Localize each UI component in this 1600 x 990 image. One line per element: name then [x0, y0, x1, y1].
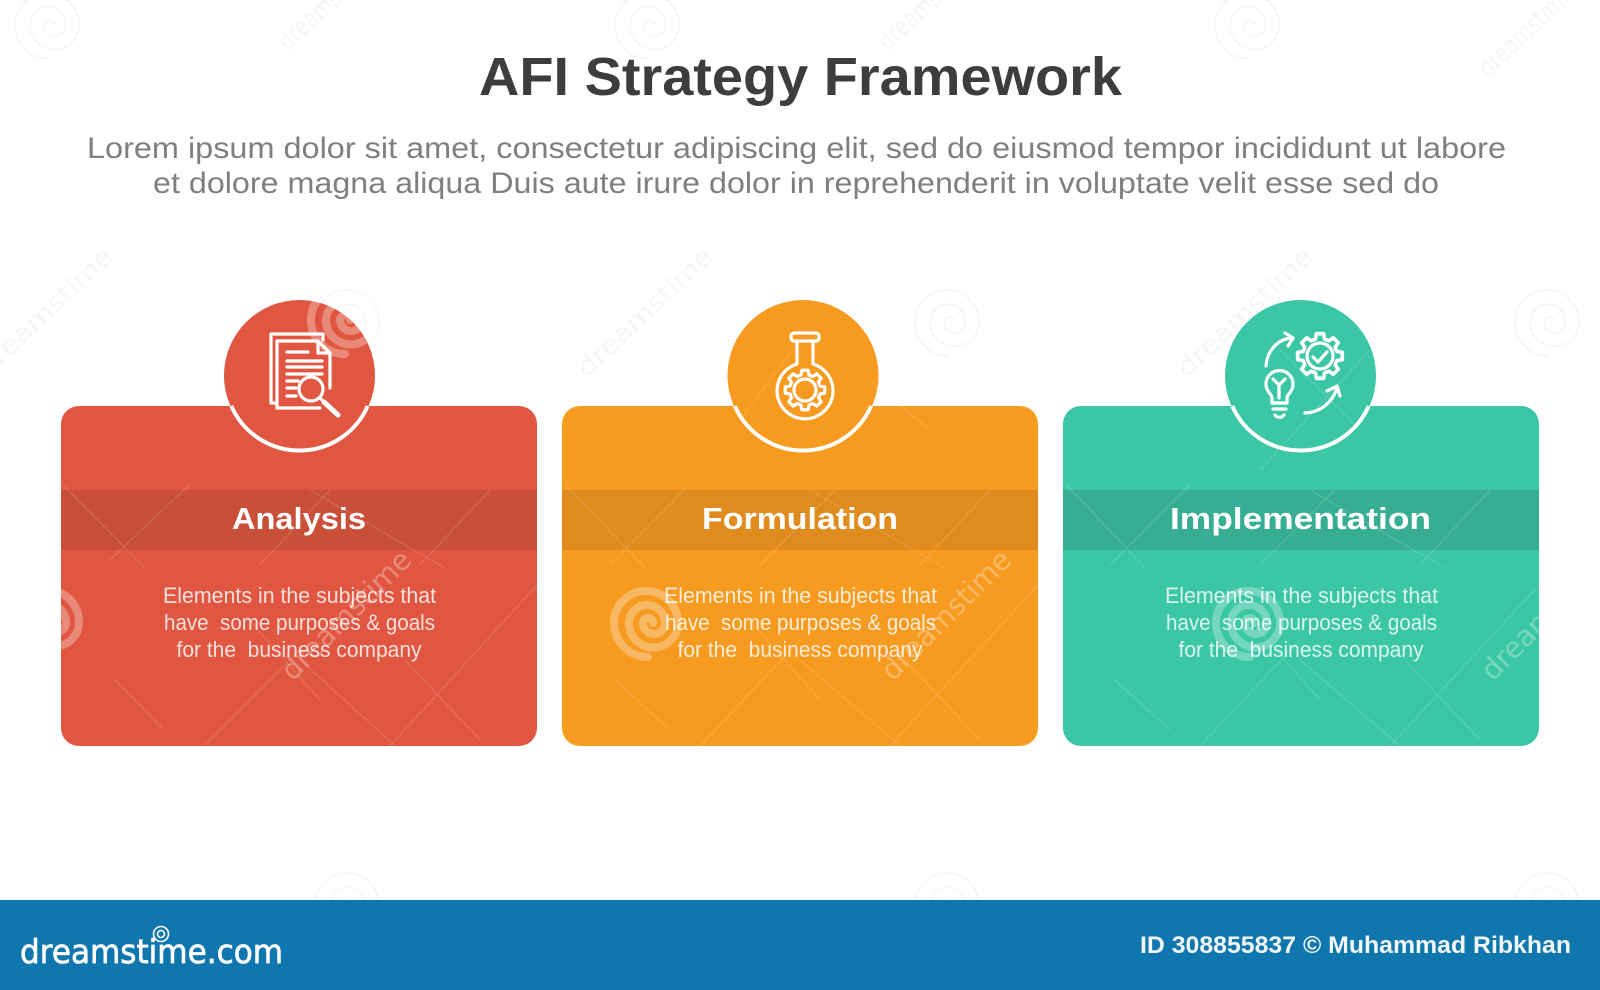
- text block: implementation description: Elements in the subjects that: [1165, 583, 1438, 608]
- text block: analysis description: [163, 583, 436, 662]
- watermark text over cards: [274, 543, 1600, 687]
- heading: formulation: Formulation: [702, 501, 898, 536]
- icon: gear, bulb and cycle arrows: [1266, 333, 1342, 417]
- watermark text over cards: dreamstime: [874, 543, 1018, 687]
- text block: formulation description: [664, 583, 937, 662]
- heading: implementation: Implementation: [1170, 501, 1431, 536]
- icon: flask with gear: [777, 333, 833, 419]
- text block: implementation description: for the business company: [1178, 637, 1424, 662]
- icon: document with magnifier: [271, 334, 338, 415]
- band: formulation heading strip: [562, 490, 1038, 550]
- text block: analysis description: for the business company: [176, 637, 422, 662]
- watermark text on background: [0, 0, 1581, 383]
- title: AFI Strategy Framework: [479, 47, 1123, 107]
- icon: logo spiral: [154, 926, 168, 942]
- subtitle text: et dolore magna aliqua Duis aute irure dolor in reprehenderit in voluptate velit esse sed do: [153, 167, 1439, 200]
- subtitle text: [87, 132, 1506, 200]
- watermark text on background: dreamstime: [1171, 242, 1320, 383]
- card: analysis background: [61, 406, 537, 746]
- card: formulation background: [562, 406, 1038, 746]
- band: analysis heading strip: [61, 490, 537, 550]
- watermark text on background: dreamstime: [571, 242, 720, 383]
- text block: formulation description: have some purposes & goals: [665, 610, 936, 635]
- card: implementation background: [1063, 406, 1539, 746]
- watermark text over cards: dreamstime: [274, 543, 418, 687]
- icon circle: analysis: [224, 300, 375, 451]
- panel: analysis: [61, 300, 537, 746]
- subtitle text: Lorem ipsum dolor sit amet, consectetur adipiscing elit, sed do eiusmod tempor incididunt ut labore: [87, 132, 1506, 165]
- text block: analysis description: have some purposes & goals: [164, 610, 435, 635]
- panel: implementation: [1063, 300, 1539, 746]
- text block: analysis description: Elements in the subjects that: [163, 583, 436, 608]
- icon circle: formulation: [728, 300, 878, 451]
- icon circle: implementation: [1225, 300, 1376, 451]
- footer logo: dreamstime.com: [20, 932, 283, 971]
- text block: formulation description: for the business company: [678, 637, 922, 662]
- band: implementation heading strip: [1063, 490, 1539, 550]
- footer bar: [0, 900, 1600, 990]
- text block: implementation description: [1165, 583, 1438, 662]
- text block: implementation description: have some purposes & goals: [1166, 610, 1437, 635]
- watermark lines and spirals over cards: [15, 288, 1539, 760]
- text block: formulation description: Elements in the subjects that: [664, 583, 937, 608]
- footer credit: ID 308855837 © Muhammad Ribkhan: [1140, 932, 1571, 959]
- heading: analysis: Analysis: [232, 501, 366, 536]
- panel: formulation: [562, 300, 1038, 746]
